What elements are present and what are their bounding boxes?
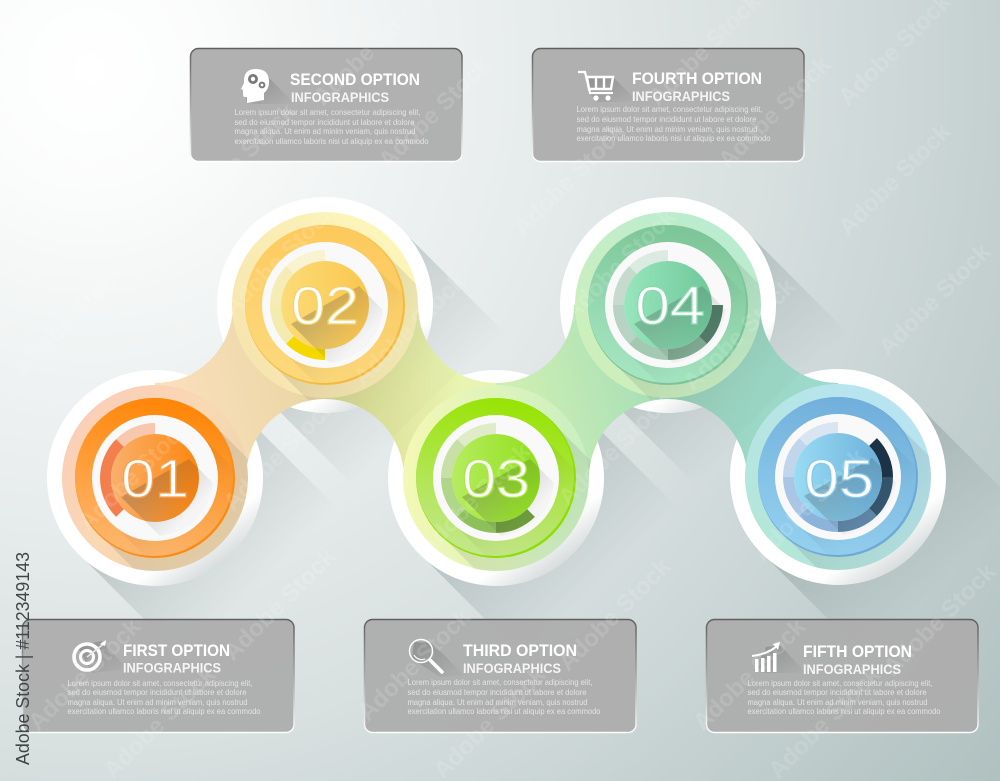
stock watermark: Adobe Stock: [833, 118, 957, 241]
stock watermark: Adobe Stock: [558, 203, 682, 326]
stock watermark: Adobe Stock: [678, 273, 802, 396]
long shadows behind the white discs: [79, 229, 1000, 674]
stock watermark: Adobe Stock: [353, 603, 477, 726]
body text: exercitation ullamco laboris nisi ut aliquip ex ea commodo: [234, 136, 429, 146]
body text: Lorem ipsum dolor sit amet, consectetur adipiscing elit,: [576, 104, 762, 114]
panel: third option: INFOGRAPHICS: [463, 660, 561, 676]
stock watermark: Adobe Stock: [178, 98, 302, 221]
stock watermark: Adobe Stock: [713, 51, 837, 174]
stock id vertical label: Adobe Stock | #112349143: [13, 552, 33, 765]
body text: magna aliqua. Ut enim ad minim veniam, quis nostrud: [234, 126, 416, 136]
circle 02: [245, 225, 405, 385]
body text: magna aliqua. Ut enim ad minim veniam, quis nostrud: [748, 697, 928, 707]
panel: fifth option: [706, 620, 978, 732]
icon: rising bar chart: [752, 642, 806, 673]
heading: FIFTH OPTION: [803, 642, 912, 661]
panel: fourth option: [532, 48, 804, 162]
body text: sed do eiusmod tempor incididunt ut labore et dolore: [408, 687, 587, 697]
heading: THIRD OPTION: [463, 641, 577, 660]
body text: exercitation ullamco laboris nisi ut aliquip ex ea commodo: [576, 133, 771, 143]
number 04: 04: [635, 276, 705, 336]
panel: first option: [22, 620, 294, 732]
body text: [234, 107, 429, 146]
body text: Lorem ipsum dolor sit amet, consectetur adipiscing elit,: [234, 107, 420, 117]
icon: shopping cart: [578, 72, 638, 102]
panel: third option: [364, 620, 636, 732]
heading: FOURTH OPTION: [632, 69, 762, 88]
stock watermark: Adobe Stock: [98, 661, 222, 781]
panel: first option: INFOGRAPHICS: [123, 660, 221, 676]
heading: SECOND OPTION: [290, 70, 420, 89]
glass connector bands: [155, 305, 838, 478]
shadows cast by the coloured rings: [82, 226, 931, 571]
stock watermark: Adobe Stock: [8, 258, 132, 381]
stock watermark: Adobe Stock: [688, 613, 812, 736]
stock watermark: Adobe Stock: [218, 393, 342, 516]
number 05: 05: [804, 449, 874, 509]
body text: sed do eiusmod tempor incididunt ut labore et dolore: [576, 114, 757, 124]
white discs: [47, 197, 946, 586]
glass halos: [62, 212, 931, 571]
stock watermark: Adobe Stock: [763, 661, 887, 781]
icon: magnifying glass: [410, 640, 464, 677]
stock watermark: Adobe Stock: [43, 55, 167, 178]
body text: exercitation ullamco laboris nisi ut aliquip ex ea commodo: [748, 706, 941, 716]
circle 05: [758, 397, 918, 557]
body text: magna aliqua. Ut enim ad minim veniam, quis nostrud: [408, 697, 588, 707]
stock watermark: Adobe Stock: [553, 388, 677, 511]
body text: sed do eiusmod tempor incididunt ut labore et dolore: [68, 687, 247, 697]
stock watermark: Adobe Stock: [373, 51, 497, 174]
body text: Lorem ipsum dolor sit amet, consectetur adipiscing elit,: [748, 678, 932, 688]
body text: [748, 678, 941, 716]
stock watermark: Adobe Stock: [218, 543, 342, 666]
number 02: 02: [291, 276, 359, 336]
stock watermark: Adobe Stock: [873, 238, 997, 361]
body text: exercitation ullamco laboris nisi ut aliquip ex ea commodo: [68, 706, 261, 716]
panel: second option: INFOGRAPHICS: [291, 89, 389, 105]
panel: fourth option: INFOGRAPHICS: [632, 88, 730, 104]
stock watermark: Adobe Stock: [218, 198, 342, 321]
panel: second option: [190, 48, 462, 162]
stock watermark: Adobe Stock: [428, 661, 552, 781]
stock watermark: Adobe Stock: [413, 438, 537, 561]
circle 04: [588, 225, 748, 385]
icon: target with arrow: [74, 640, 127, 673]
number 03: 03: [462, 449, 530, 509]
body text: magna aliqua. Ut enim ad minim veniam, quis nostrud: [68, 697, 248, 707]
stock watermark: Adobe Stock: [73, 413, 197, 536]
body text: [408, 677, 601, 716]
stock watermark: Adobe Stock: [878, 558, 1000, 681]
body text: Lorem ipsum dolor sit amet, consectetur adipiscing elit,: [68, 678, 252, 688]
stock watermark: Adobe Stock: [348, 268, 472, 391]
circle 03: [416, 398, 576, 558]
panel: fifth option: INFOGRAPHICS: [803, 661, 901, 677]
body text: magna aliqua. Ut enim ad minim veniam, quis nostrud: [576, 124, 758, 134]
body text: sed do eiusmod tempor incididunt ut labore et dolore: [748, 687, 927, 697]
heading: FIRST OPTION: [123, 641, 230, 660]
body text: sed do eiusmod tempor incididunt ut labore et dolore: [234, 117, 415, 127]
icon: head with gears: [241, 69, 295, 104]
circle 01: [75, 398, 235, 558]
body text: [576, 104, 771, 143]
body text: exercitation ullamco laboris nisi ut aliquip ex ea commodo: [408, 706, 601, 716]
body text: Lorem ipsum dolor sit amet, consectetur adipiscing elit,: [408, 677, 592, 687]
number 01: 01: [121, 449, 189, 509]
stock watermark: Adobe Stock: [748, 443, 872, 566]
stock watermark: Adobe Stock: [553, 553, 677, 676]
stock watermark: Adobe Stock: [508, 118, 632, 241]
stock watermark: Adobe Stock: [23, 613, 147, 736]
body text: [68, 678, 261, 716]
